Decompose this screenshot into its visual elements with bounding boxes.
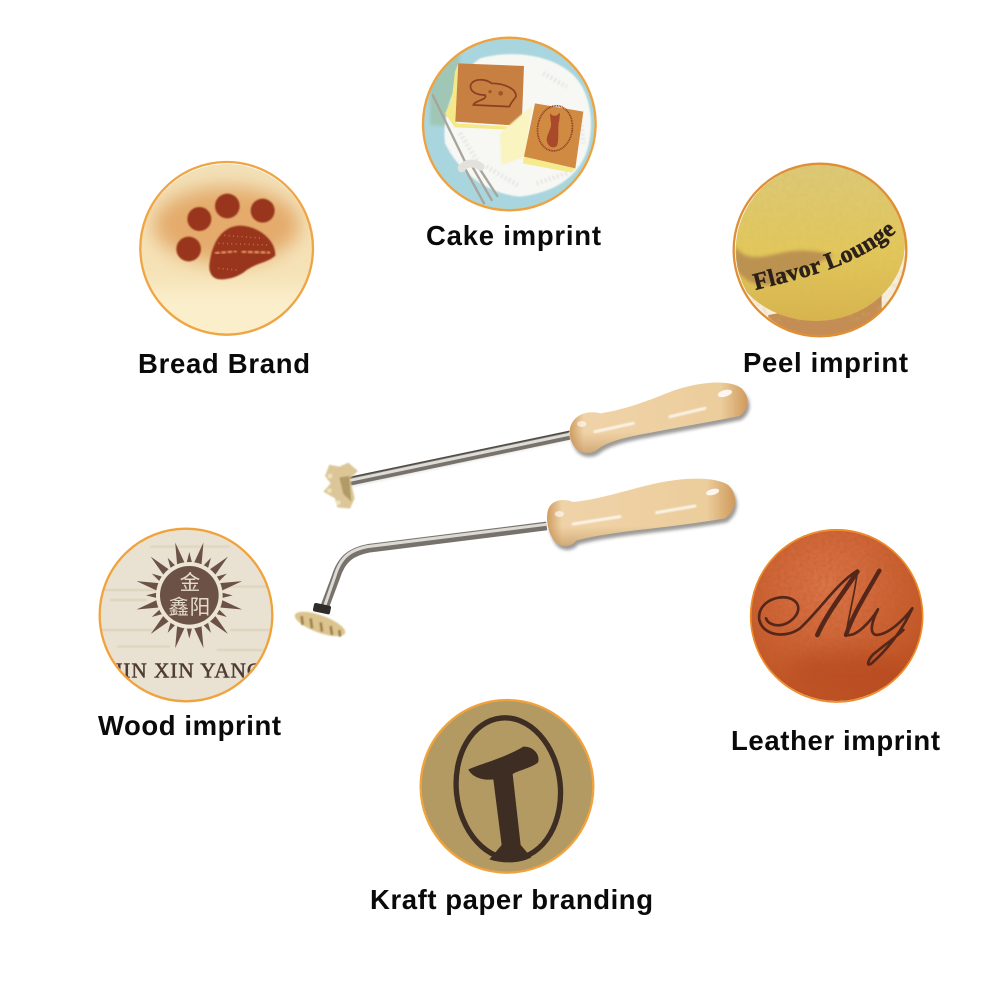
- label: kraft paper branding: Kraft paper branding: [370, 884, 653, 915]
- circle: leather imprint: [750, 529, 924, 703]
- brass head: [313, 603, 331, 615]
- label: leather imprint: Leather imprint: [731, 725, 940, 756]
- icon: oval T stamp: [449, 713, 567, 864]
- circle: peel imprint: [732, 162, 908, 338]
- rod: [325, 526, 547, 606]
- cake slice: dog imprint: [445, 63, 524, 130]
- monogram: My: [759, 571, 912, 665]
- tool: bent branding iron: [292, 479, 737, 641]
- label: peel imprint: Peel imprint: [743, 347, 908, 378]
- imprint text: Flavor Lounge: [752, 224, 896, 290]
- icon: paw print: [176, 194, 275, 279]
- cake slice: cat imprint: [523, 103, 583, 173]
- handle: [570, 383, 748, 453]
- label: cake imprint: Cake imprint: [426, 220, 601, 251]
- label: wood imprint: Wood imprint: [98, 710, 281, 741]
- circle: kraft paper branding: [420, 700, 594, 873]
- icon: fork: [433, 95, 497, 203]
- circle: cake imprint: [422, 36, 597, 212]
- icon: sun logo: 鑫: [168, 590, 189, 620]
- handle: [547, 479, 735, 546]
- rod: [348, 435, 569, 482]
- doily: [444, 54, 591, 197]
- brass head: [323, 463, 358, 509]
- tool: straight branding iron: [323, 383, 750, 509]
- icon: sun logo: 阳: [190, 590, 210, 620]
- label: bread brand: Bread Brand: [138, 348, 310, 379]
- circle: wood imprint: [98, 528, 274, 702]
- brand text: JIN XIN YANG: [114, 658, 262, 682]
- icon: sun logo: 金: [180, 565, 201, 595]
- circle: bread brand imprint: [139, 160, 314, 336]
- icon: sun logo: [135, 541, 243, 649]
